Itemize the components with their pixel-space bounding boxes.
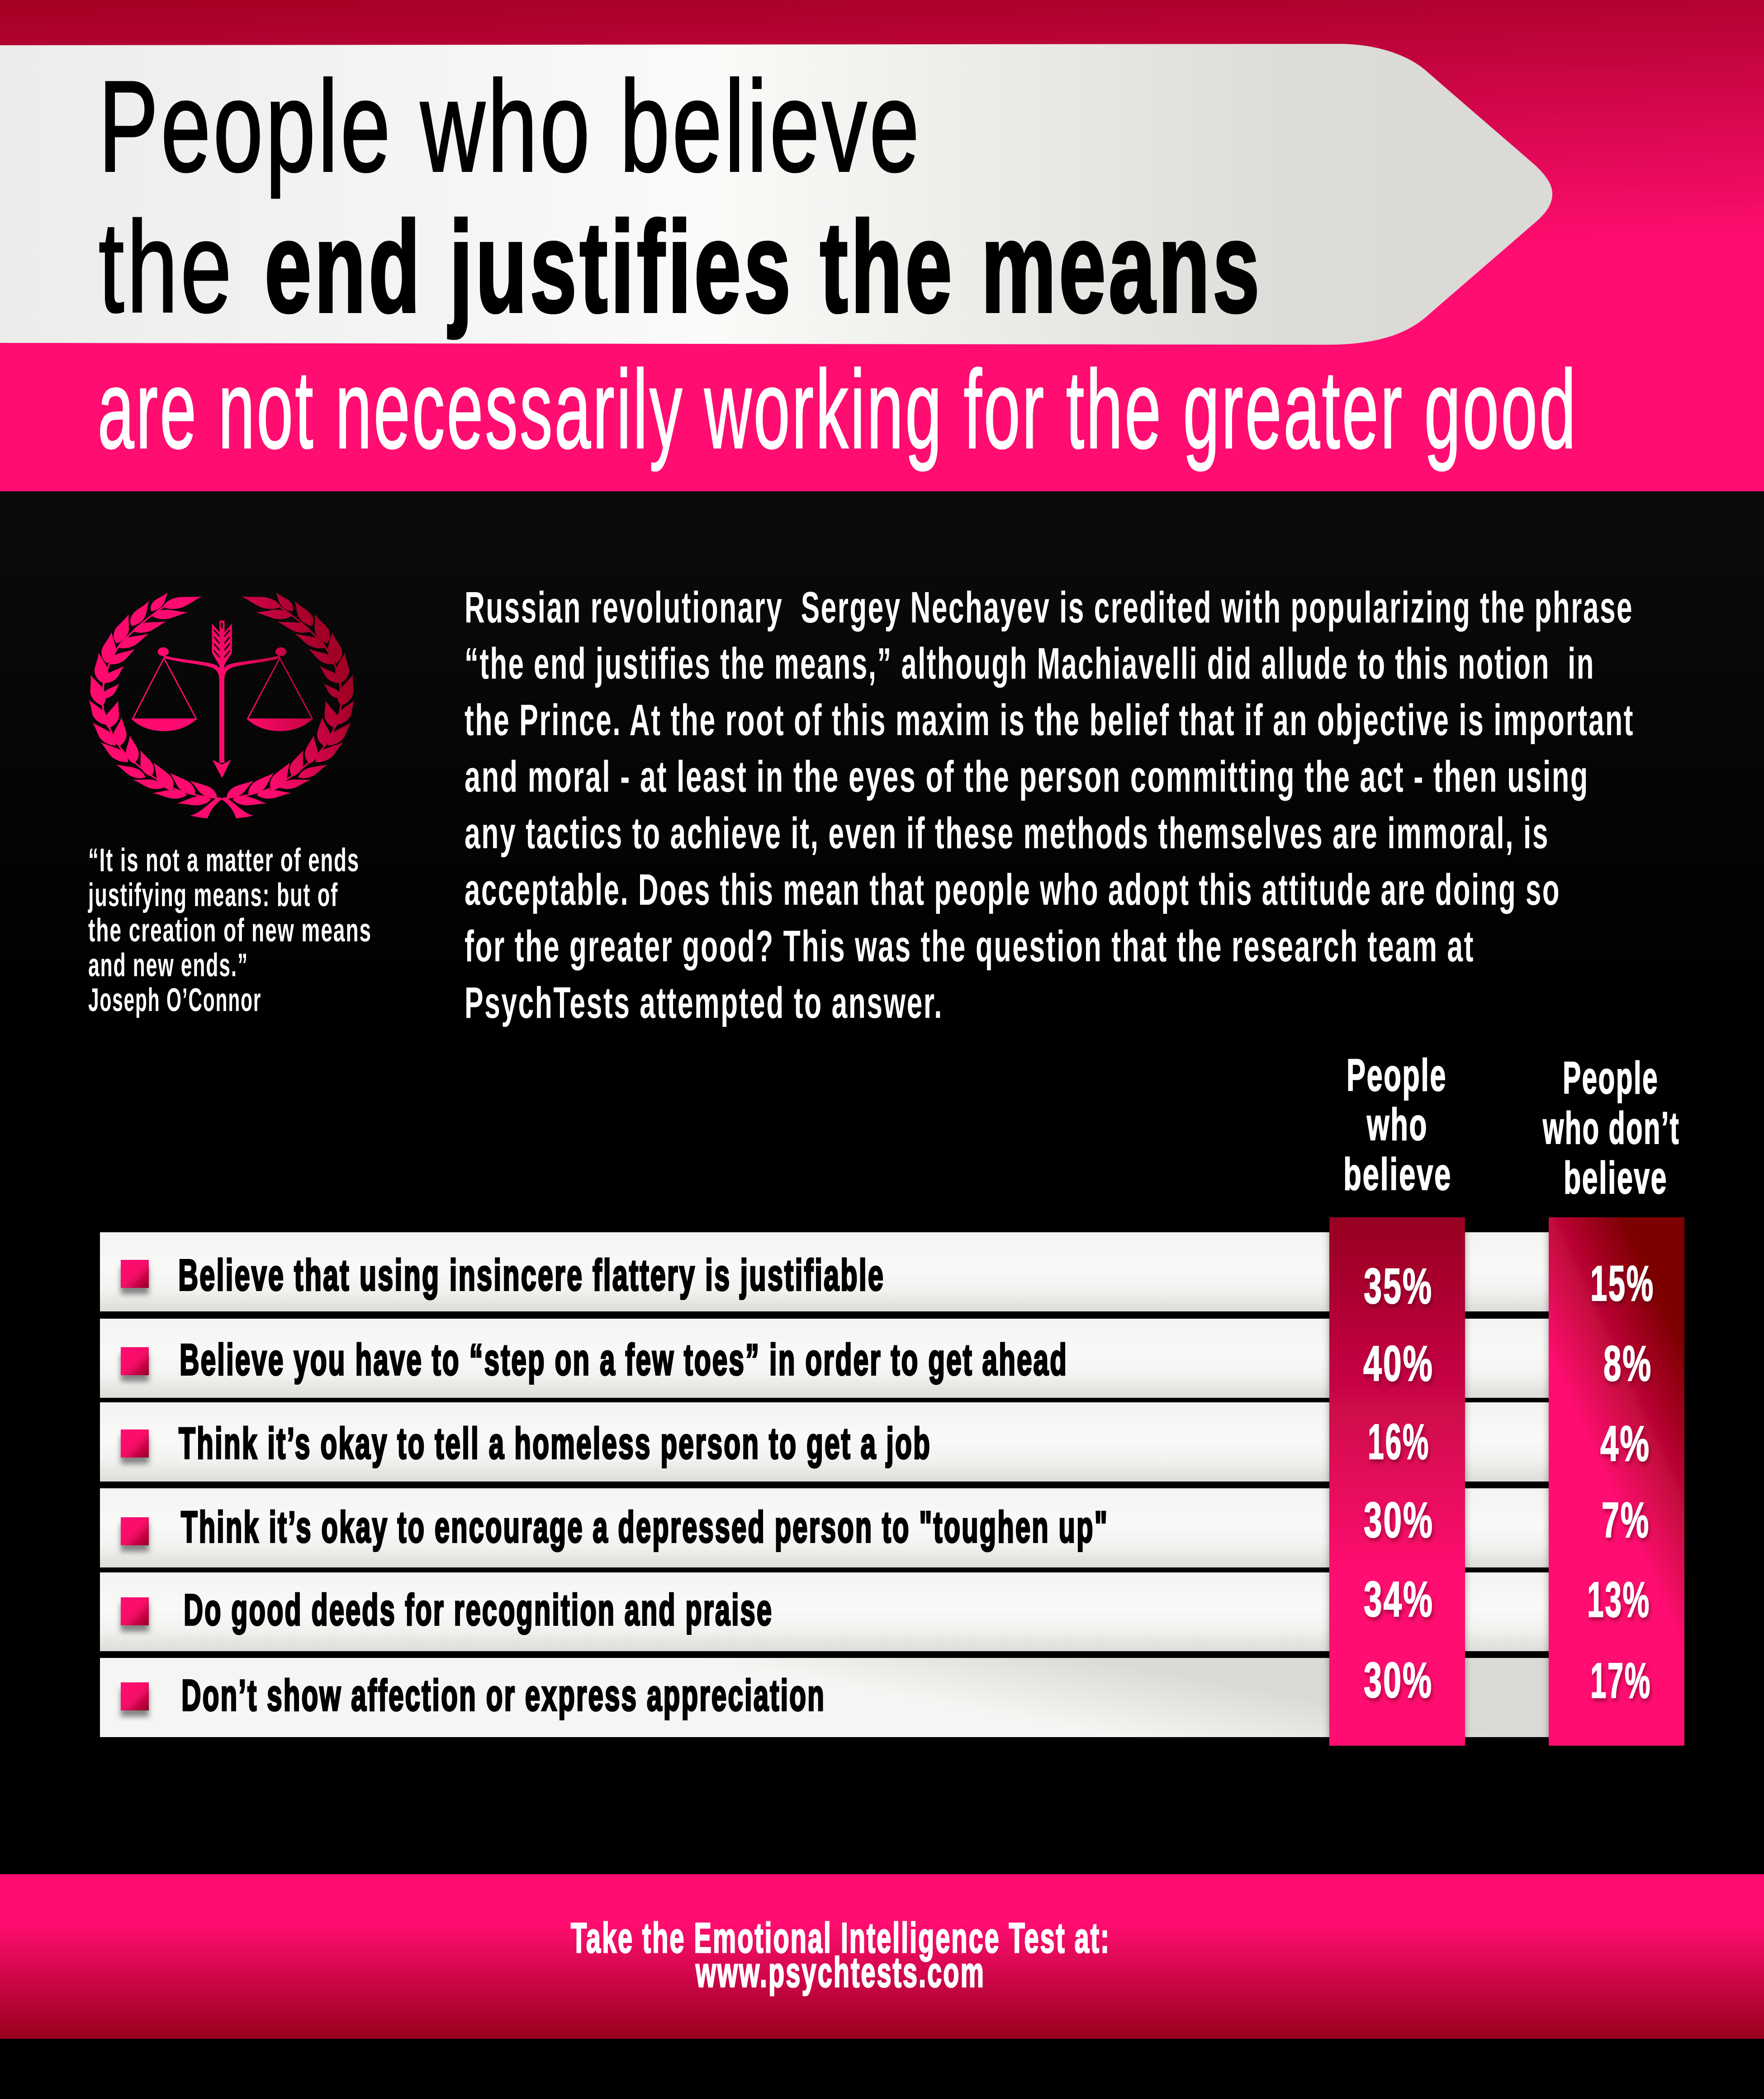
column: people who believe values <box>1329 1217 1465 1746</box>
table row 1: Believe that using insincere flattery is justifiable <box>178 1250 885 1300</box>
column: people who don't believe values: 17% <box>1590 1653 1651 1709</box>
table row 3 <box>100 1402 1549 1482</box>
column: people who don't believe values <box>1549 1217 1684 1746</box>
title line 2: end justifies the means <box>265 195 1262 340</box>
column heading: people who believe: believe <box>1343 1149 1452 1200</box>
footer call to action <box>571 1914 1110 1996</box>
column: people who don't believe values: 7% <box>1602 1492 1650 1548</box>
title line 2 <box>99 195 1262 340</box>
title line 1: People who believe <box>99 54 922 199</box>
column: people who don't believe values: 13% <box>1587 1572 1650 1628</box>
quote: and new ends.” <box>88 947 248 983</box>
column: people who believe values: 30% <box>1364 1492 1434 1548</box>
scales and arrow <box>131 621 313 778</box>
table row 5: Do good deeds for recognition and praise <box>184 1585 773 1634</box>
icon: laurel wreath with scales and arrow <box>89 593 355 818</box>
table row 1 <box>100 1232 1549 1311</box>
wreath <box>89 593 355 818</box>
table row 5 <box>100 1572 1549 1651</box>
table row 4: Think it’s okay to encourage a depressed person to "toughen up" <box>181 1502 1109 1552</box>
title line 2: the <box>99 195 234 339</box>
column heading: people who believe: who <box>1366 1099 1428 1150</box>
title banner <box>0 44 1552 345</box>
column: people who don't believe values: 8% <box>1603 1336 1652 1391</box>
intro paragraph <box>465 583 1634 1027</box>
quote: the creation of new means <box>88 912 372 949</box>
table row 6: Don’t show affection or express appreciation <box>181 1671 825 1720</box>
quote: Joseph O’Connor <box>88 982 261 1018</box>
column heading: people who don't believe <box>1542 1053 1680 1203</box>
column heading: people who believe <box>1343 1050 1452 1200</box>
footer band <box>0 1874 1764 2039</box>
table row 2: Believe you have to “step on a few toes” in order to get ahead <box>180 1335 1068 1384</box>
quote: “It is not a matter of ends <box>88 842 360 879</box>
table row 2 <box>100 1319 1549 1398</box>
quote: justifying means: but of <box>88 877 338 913</box>
column: people who believe values: 35% <box>1364 1258 1433 1314</box>
column heading: people who don't believe: believe <box>1564 1153 1668 1203</box>
column heading: people who believe: People <box>1347 1050 1447 1101</box>
intro paragraph: PsychTests attempted to answer. <box>465 978 943 1027</box>
table row 4 <box>100 1488 1549 1567</box>
table row 6 <box>100 1658 1549 1737</box>
column: people who believe values: 34% <box>1364 1572 1434 1627</box>
table row 3: Think it’s okay to tell a homeless person to get a job <box>179 1419 931 1468</box>
column: people who don't believe values: 15% <box>1590 1256 1655 1311</box>
footer call to action: Take the Emotional Intelligence Test at: <box>571 1914 1110 1961</box>
footer call to action: www.psychtests.com <box>695 1948 985 1996</box>
column heading: people who don't believe: People <box>1563 1053 1659 1103</box>
column: people who believe values: 16% <box>1368 1414 1430 1470</box>
quote <box>88 842 372 1018</box>
column: people who believe values: 40% <box>1363 1336 1434 1391</box>
column: people who don't believe values: 4% <box>1600 1416 1650 1472</box>
body background <box>0 491 1764 1079</box>
header band <box>0 0 1764 491</box>
column: people who believe values: 30% <box>1364 1653 1433 1708</box>
